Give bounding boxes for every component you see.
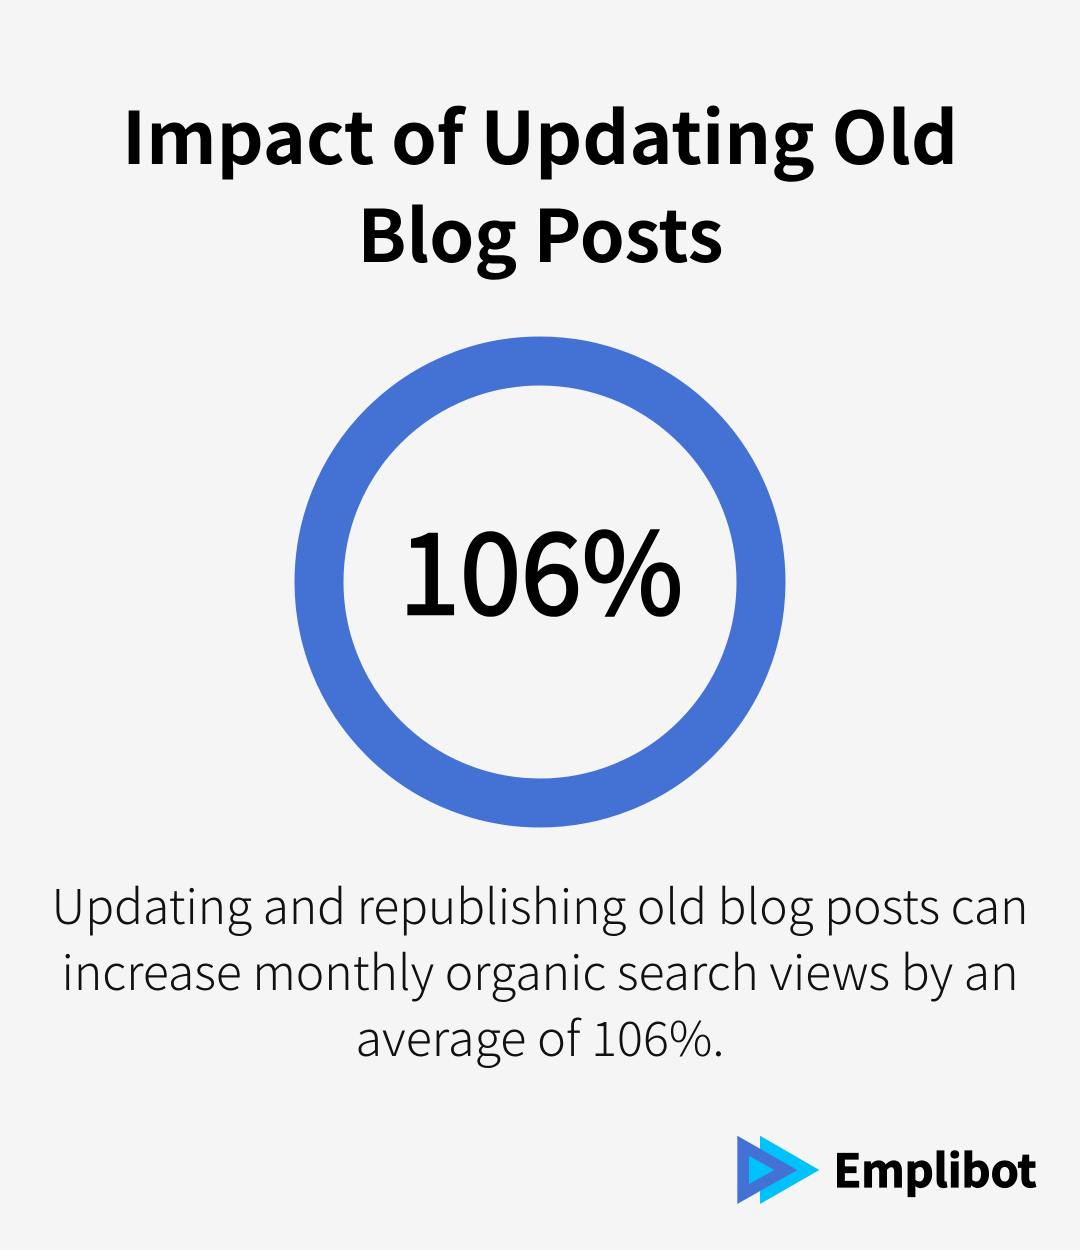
title: [122, 80, 958, 283]
stat value: 106%: [399, 485, 683, 647]
donut ring: [319, 361, 761, 803]
description: average of 106%.: [356, 1000, 724, 1070]
wordmark: Emplibot: [834, 1135, 1037, 1200]
title: Impact of Updating Old: [122, 80, 958, 185]
description: [52, 868, 1028, 1070]
logo: [737, 1135, 1037, 1204]
icon: play triangles: [737, 1136, 819, 1204]
title: Blog Posts: [358, 178, 724, 283]
description: increase monthly organic search views by an: [62, 934, 1018, 1004]
description: Updating and republishing old blog posts can: [52, 868, 1028, 938]
